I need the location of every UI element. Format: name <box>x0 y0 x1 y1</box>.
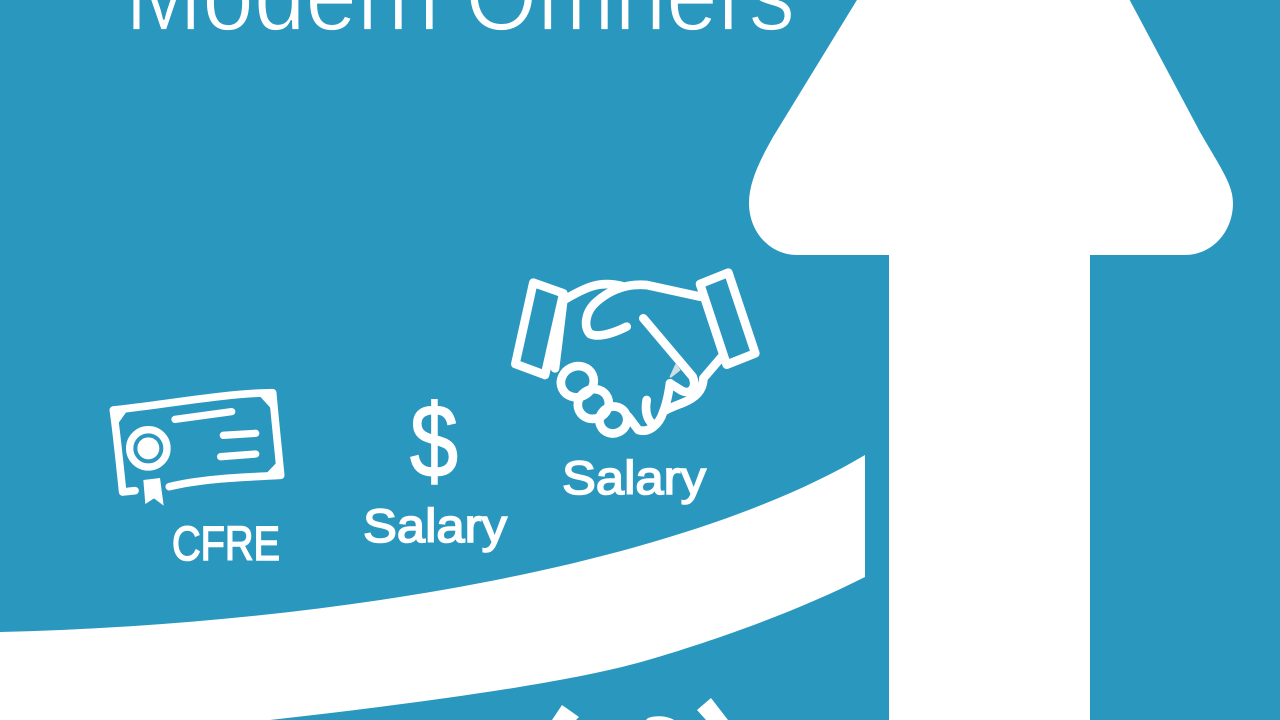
icon: handshake <box>515 273 755 438</box>
icon: handshake top cropped at bottom edge <box>552 698 728 720</box>
label: CFRE: CFRE <box>172 518 280 571</box>
label: Salary centre: Salary <box>363 499 508 552</box>
swoosh: rising curved band <box>0 455 865 720</box>
icon: large upward arrow <box>749 0 1233 720</box>
icon: dollar sign: $ <box>410 384 458 500</box>
icon: certificate <box>113 393 281 506</box>
label: Salary right: Salary <box>562 451 707 504</box>
